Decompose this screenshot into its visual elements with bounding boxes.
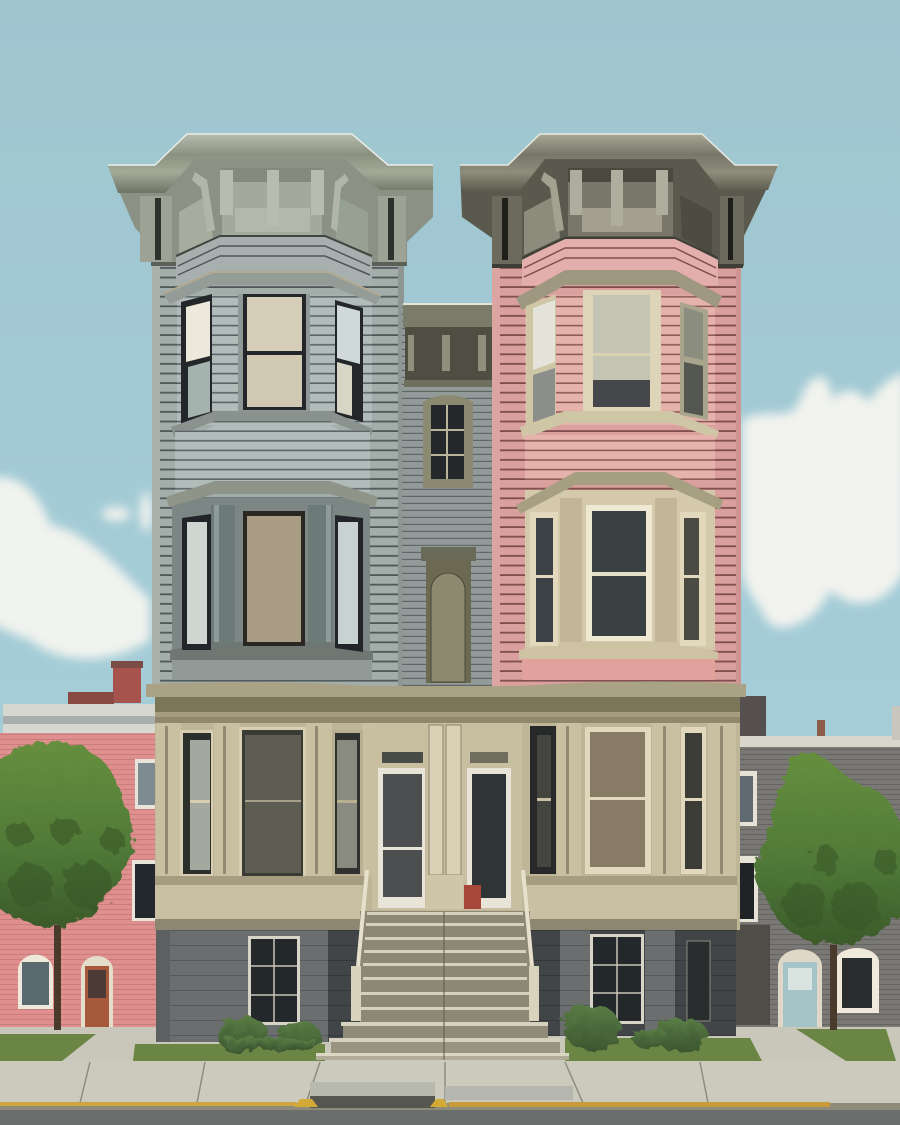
window [239,727,306,878]
left cloud [0,477,152,659]
right bay lower [516,472,723,680]
door [81,956,113,1028]
window [733,771,757,826]
hood [516,270,722,310]
window [181,294,212,424]
window [132,860,158,921]
right tree [754,752,900,1030]
window [238,294,310,414]
right railing [523,870,539,1021]
sill [171,411,373,437]
red mailbox [464,885,481,909]
frieze front [568,168,673,236]
left background building [0,661,158,1029]
window [586,505,652,641]
shrubs right [564,1004,708,1052]
window [835,948,879,1013]
basement window [590,934,644,1024]
window [680,302,708,420]
sill [520,411,719,439]
left bay upper [163,236,381,437]
frieze side panels [179,195,213,255]
window [182,514,211,650]
grass [0,1029,896,1061]
window [530,726,556,874]
left tree [0,742,133,1030]
basement [156,930,736,1042]
frieze front [222,168,322,236]
base of cornice [492,264,743,268]
right entry door [467,752,511,908]
storm grate [310,1096,435,1108]
window [335,515,363,652]
shrubs left [216,1016,322,1052]
basement window [248,936,300,1025]
window [526,294,556,426]
window [583,290,661,412]
brackets [570,170,668,226]
entry surround [372,723,522,910]
base of cornice [151,262,407,266]
window [135,759,158,809]
window [585,727,651,874]
basement window [687,941,710,1021]
window [332,730,363,876]
tall door [421,547,476,683]
bay pilasters [156,723,736,876]
brackets [220,170,324,226]
sidewalk and road [0,1027,900,1125]
left cornice [108,134,433,266]
door [778,949,822,1029]
small window [423,395,473,488]
middle section [402,303,494,689]
window [335,300,363,422]
iron balcony gate [735,925,770,1025]
hood [163,272,381,304]
corner blocks [140,196,406,262]
gray tower siding [152,262,404,687]
right cornice [460,134,778,268]
right background building [733,696,900,1029]
bay roof [522,238,718,285]
left entry door [378,752,425,908]
ground floor [146,681,746,930]
window [243,511,305,646]
window [734,856,758,922]
panel band [155,876,737,885]
right cloud [742,372,900,627]
front stairs [316,870,569,1060]
window [680,512,706,646]
entry pillars [429,725,461,875]
arched window [18,955,53,1009]
frieze side panels [524,195,560,255]
left railing [351,870,367,1021]
bay roof [176,236,372,285]
window [180,730,213,877]
left bay lower [166,425,378,680]
pink tower siding [492,262,741,687]
window [681,727,706,874]
corner blocks [492,196,744,266]
window [530,512,558,646]
right bay upper [516,238,722,480]
